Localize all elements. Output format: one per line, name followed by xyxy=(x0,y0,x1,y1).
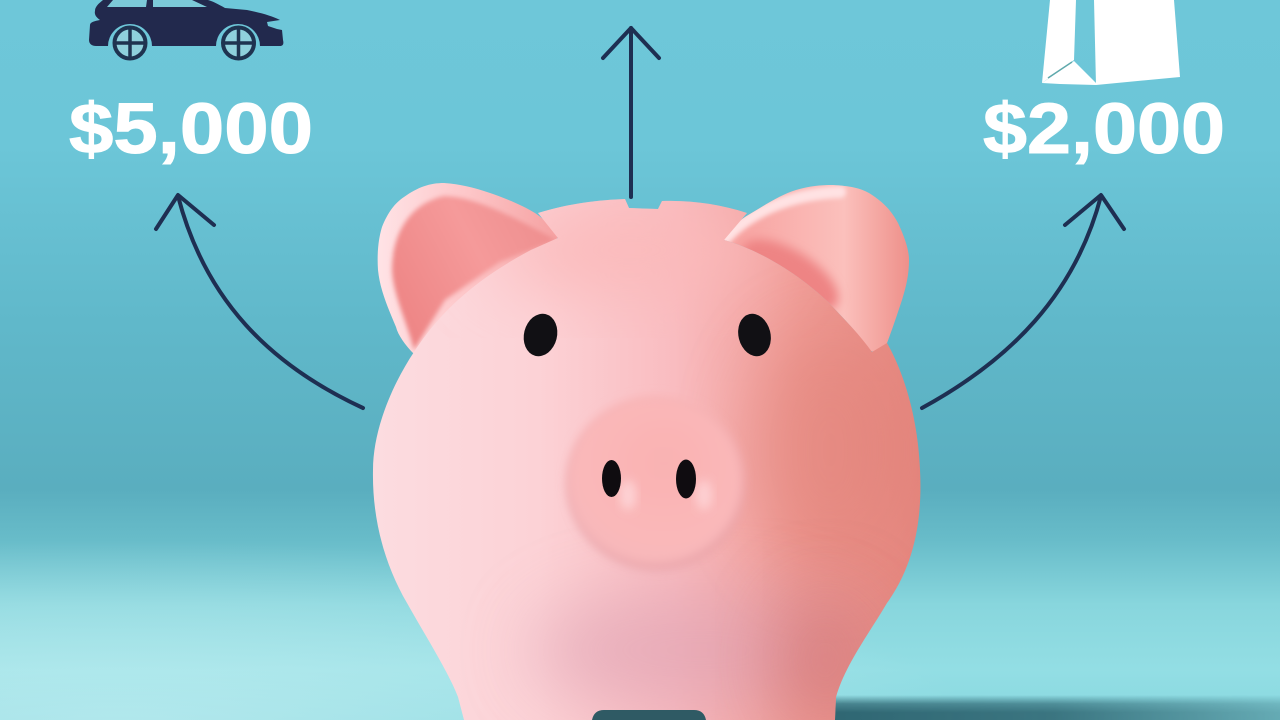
car wheel arches xyxy=(108,24,260,50)
snout right highlight xyxy=(696,480,712,510)
label: $2,000: $2,000 xyxy=(983,90,1225,169)
snout face xyxy=(567,396,743,564)
icon: car xyxy=(89,0,283,58)
label: $5,000: $5,000 xyxy=(69,90,313,169)
pig body shading xyxy=(490,210,910,720)
pig body xyxy=(373,199,920,720)
left ear inner xyxy=(392,196,556,350)
snout underside shadow xyxy=(568,402,744,570)
arrow: right curved xyxy=(922,195,1124,408)
icon: shopping bag xyxy=(1042,0,1180,85)
pig left nostril xyxy=(602,460,621,497)
arrow: centre up xyxy=(603,28,659,197)
piggy bank xyxy=(373,183,920,720)
arrow: left curved xyxy=(156,195,363,408)
pig belly opening xyxy=(592,710,706,720)
pig right eye xyxy=(734,310,775,360)
car windows xyxy=(107,0,207,7)
car left wheel xyxy=(114,28,146,58)
pig left ear xyxy=(378,183,560,354)
pig right nostril xyxy=(676,460,696,498)
snout left highlight xyxy=(620,480,636,510)
pig left eye xyxy=(519,310,562,360)
floor shadow xyxy=(830,695,1280,720)
right ear shading xyxy=(726,192,849,324)
floor glow xyxy=(0,530,1280,720)
pig right ear xyxy=(724,185,909,356)
car right wheel xyxy=(223,28,254,58)
pig snout xyxy=(567,396,744,570)
